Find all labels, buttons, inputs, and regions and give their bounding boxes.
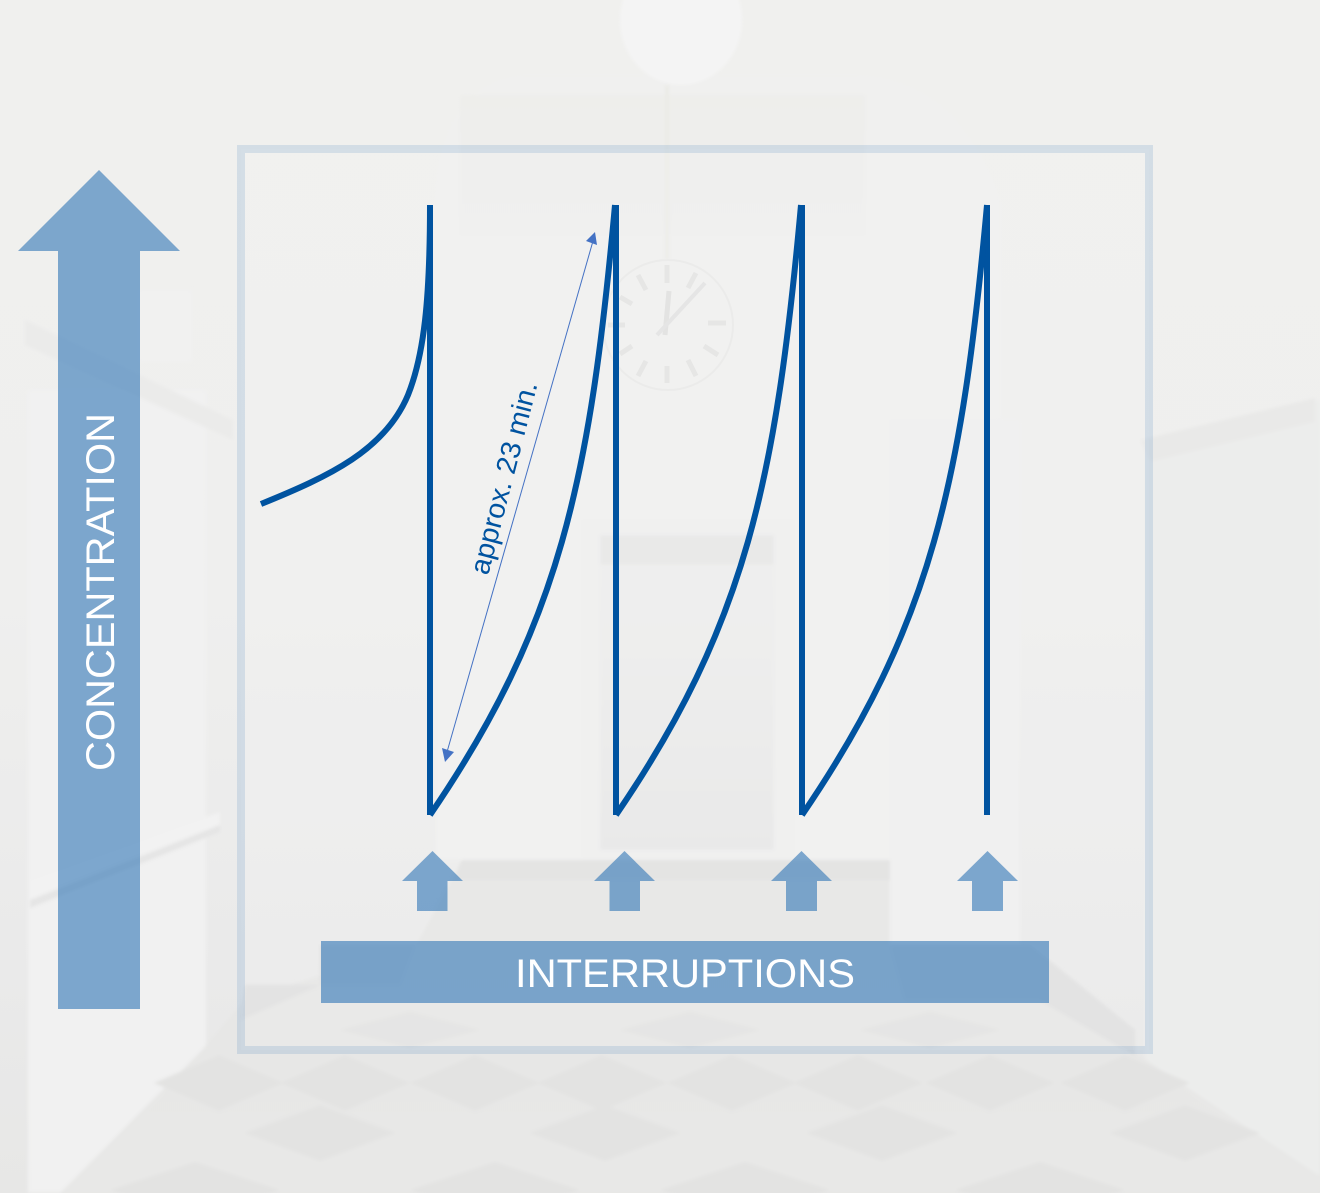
banner: interruptions: INTERRUPTIONS — [515, 952, 855, 996]
arrow: duration indicator — [442, 232, 597, 762]
banner: interruptions — [321, 941, 1049, 1003]
chart: concentration curve — [261, 205, 987, 815]
arrow: concentration axis — [18, 170, 180, 1009]
chart frame — [241, 149, 1149, 1050]
annotation: approx. 23 min.: approx. 23 min. — [464, 378, 543, 578]
arrow: interruption 2 — [594, 851, 655, 911]
arrow: interruption 3 — [771, 851, 832, 911]
arrow: interruption 1 — [402, 851, 463, 911]
axis label: concentration: CONCENTRATION — [79, 413, 123, 771]
icon: wall clock — [603, 260, 733, 390]
arrow: interruption 4 — [957, 851, 1018, 911]
